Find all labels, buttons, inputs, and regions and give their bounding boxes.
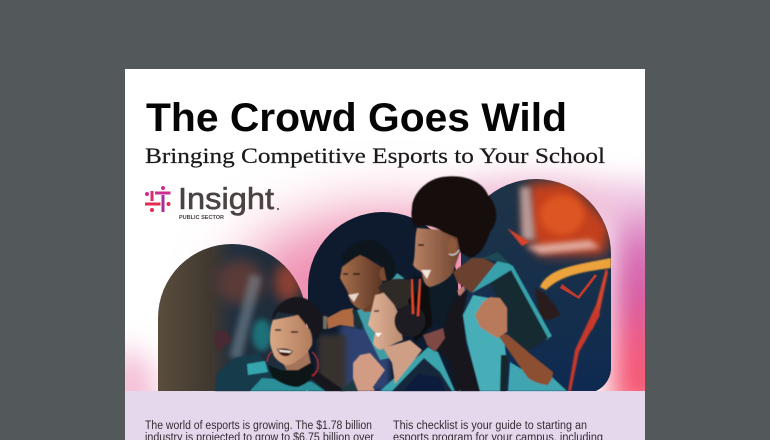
pink and magenta gradient backdrop [125,160,645,391]
Insight Public Sector logo [145,181,279,221]
afro hair [411,176,496,258]
face [270,315,312,365]
headphone cup [394,305,426,337]
neck [280,350,312,376]
navy jersey upper [400,280,458,328]
photo: boy on the left [214,297,345,391]
ear [447,238,457,256]
hair [272,297,323,340]
hair [342,240,395,283]
neck [383,340,422,384]
dark shoulder panel [490,270,548,352]
neck [360,284,394,312]
lavender text panel [125,391,645,440]
jersey teal [380,347,455,391]
photo: centre arch [308,212,458,391]
wristband [323,316,327,329]
photo: left arch with blurred arena [158,244,308,391]
jacket bright teal panel [247,361,268,375]
dark sleeve [437,290,485,391]
headphones [268,362,315,387]
navy shoulder [403,374,446,391]
face [368,292,403,350]
headphone orange stripes [412,279,420,316]
back sleeve [535,288,560,320]
centre seam [500,355,508,391]
collar strap [483,252,510,264]
photo: man at front centre [340,277,455,391]
headphone shadow [408,280,432,342]
eye [374,310,379,312]
headphone band top [412,277,420,279]
neck [453,258,497,293]
raised fist [475,297,507,338]
logo sub-label: PUBLIC SECTOR [179,215,224,221]
teal body [463,295,507,391]
eye [418,244,424,246]
smile [421,270,431,279]
teal shoulder trim [472,258,552,340]
jacket corner [340,380,358,391]
infographic canvas [125,69,645,440]
subtitle: Bringing Competitive Esports to Your School [145,143,605,168]
teammate hand [423,328,445,352]
ear [380,267,388,281]
logo registered dot [277,208,279,210]
logo wordmark: Insight [178,181,274,216]
fist [353,353,385,391]
photo: woman on the right [411,176,567,391]
raised fist [214,330,232,352]
mouth [348,293,359,302]
document card [125,69,645,440]
teal shirt [357,273,404,360]
raised arm [327,308,354,329]
eyes [275,330,298,332]
jersey dark panel [392,358,452,391]
eyes [343,273,360,275]
jacket lower teal panel [250,378,325,391]
small shoulder hand [457,285,465,296]
photo: man at centre back [323,240,458,360]
dark sleeve [352,310,362,330]
forearm [497,332,553,385]
photo: right arch with red and orange lights [461,179,611,391]
intro paragraph, right column: This checklist is your guide to starting an [393,420,587,432]
teal lower right [508,362,567,391]
title: The Crowd Goes Wild [146,96,567,140]
mouth [277,348,293,356]
hair [378,279,412,310]
face [340,254,383,310]
earring [449,250,459,255]
shoulder strap [310,370,345,391]
teeth [375,333,382,337]
intro paragraph, left column: The world of esports is growing. The $1.78 billion [145,420,372,432]
face [413,228,460,287]
teeth [278,350,292,353]
icon: logo mark [145,186,170,212]
jacket [215,353,330,391]
headphone cord [267,352,318,376]
